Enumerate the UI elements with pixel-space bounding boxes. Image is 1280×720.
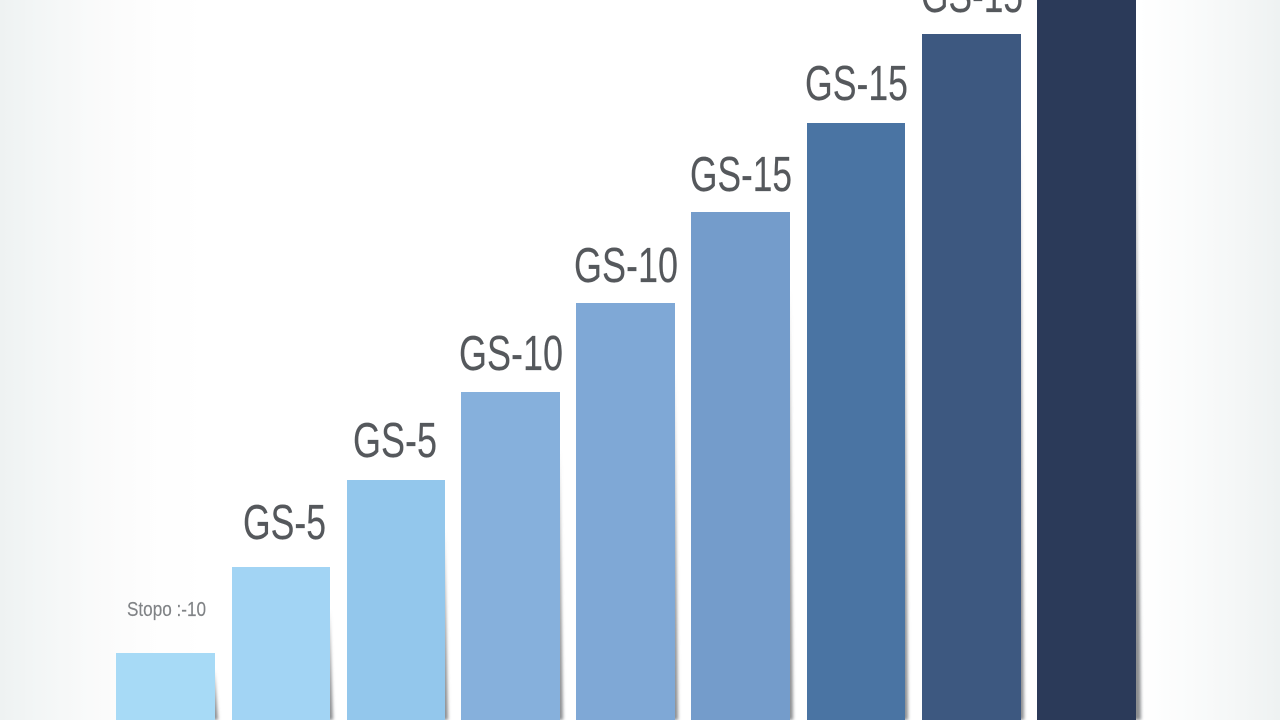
bar 6 xyxy=(691,212,793,720)
bar 9 xyxy=(1037,0,1141,720)
label: GS-5 second: GS-5 xyxy=(353,414,437,468)
bar 5 xyxy=(576,303,678,720)
label: GS-15 second: GS-15 xyxy=(805,57,908,111)
label: GS-15 first: GS-15 xyxy=(690,148,792,202)
label: Stopo :-10: Stopo :-10 xyxy=(127,599,206,621)
label: GS-10 second: GS-10 xyxy=(574,239,678,293)
bar 8 xyxy=(922,34,1024,720)
label: GS-5 first: GS-5 xyxy=(243,496,326,550)
bar 1 xyxy=(116,653,218,720)
label: GS-10 first: GS-10 xyxy=(459,327,563,381)
labels xyxy=(127,0,1023,621)
bar 3 xyxy=(347,480,448,720)
bar 7 xyxy=(807,123,908,720)
bar 2 xyxy=(232,567,333,720)
bar 4 xyxy=(461,392,563,720)
